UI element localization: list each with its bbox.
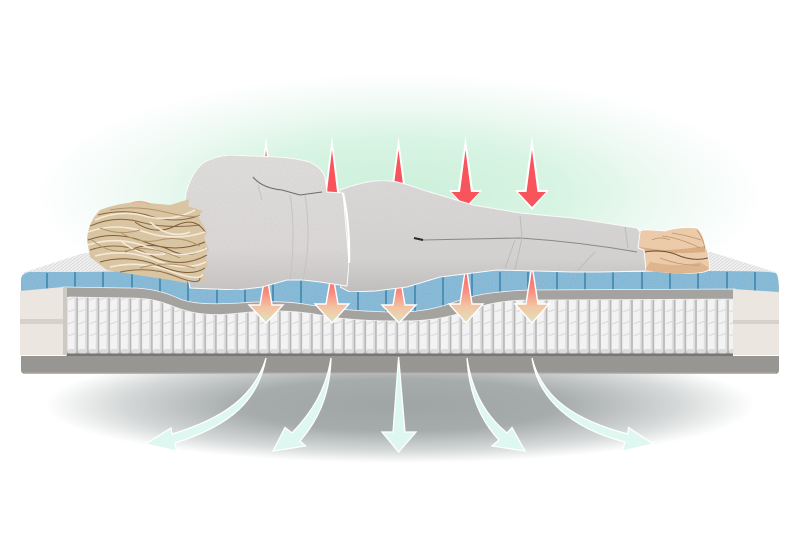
cool air arrow 3	[382, 357, 416, 452]
arrow in foam 4	[449, 265, 483, 323]
sleeping person	[87, 155, 710, 292]
grey shadow under mattress	[45, 347, 755, 463]
arrow in foam 1	[249, 270, 283, 323]
blue foam layer	[21, 270, 779, 316]
pressure arrow 4	[452, 150, 480, 207]
mattress	[20, 252, 779, 374]
base layer	[21, 356, 779, 374]
left foam edge block	[20, 287, 67, 355]
cool air arrows below mattress	[146, 357, 653, 452]
foam cell dividers	[47, 272, 755, 316]
pressure arrow 3	[393, 150, 404, 192]
feet	[638, 227, 710, 273]
blonde hair	[87, 199, 209, 283]
arrow in foam 5	[515, 265, 549, 323]
pressure arrow 1	[264, 150, 268, 170]
pressure arrow 2	[326, 150, 338, 200]
arrow in foam 2	[315, 270, 349, 323]
red arrows entering foam	[249, 265, 549, 323]
arrow in foam 3	[382, 270, 416, 323]
green glow above mattress	[35, 73, 765, 317]
mattress back surface	[22, 252, 775, 273]
right foam edge block	[733, 289, 779, 355]
leggings	[340, 181, 646, 292]
pressure arrow 5	[518, 150, 546, 207]
pocket coil layer	[66, 292, 733, 356]
cool air arrow 4	[467, 358, 525, 451]
cool air arrow 2	[273, 358, 331, 451]
cool air arrow 5	[532, 358, 653, 451]
cool air arrow 1	[146, 358, 266, 451]
white needle halos	[262, 136, 549, 210]
red pressure arrows above body	[262, 136, 549, 210]
sweater	[180, 155, 349, 290]
curved transition layer	[63, 287, 735, 321]
